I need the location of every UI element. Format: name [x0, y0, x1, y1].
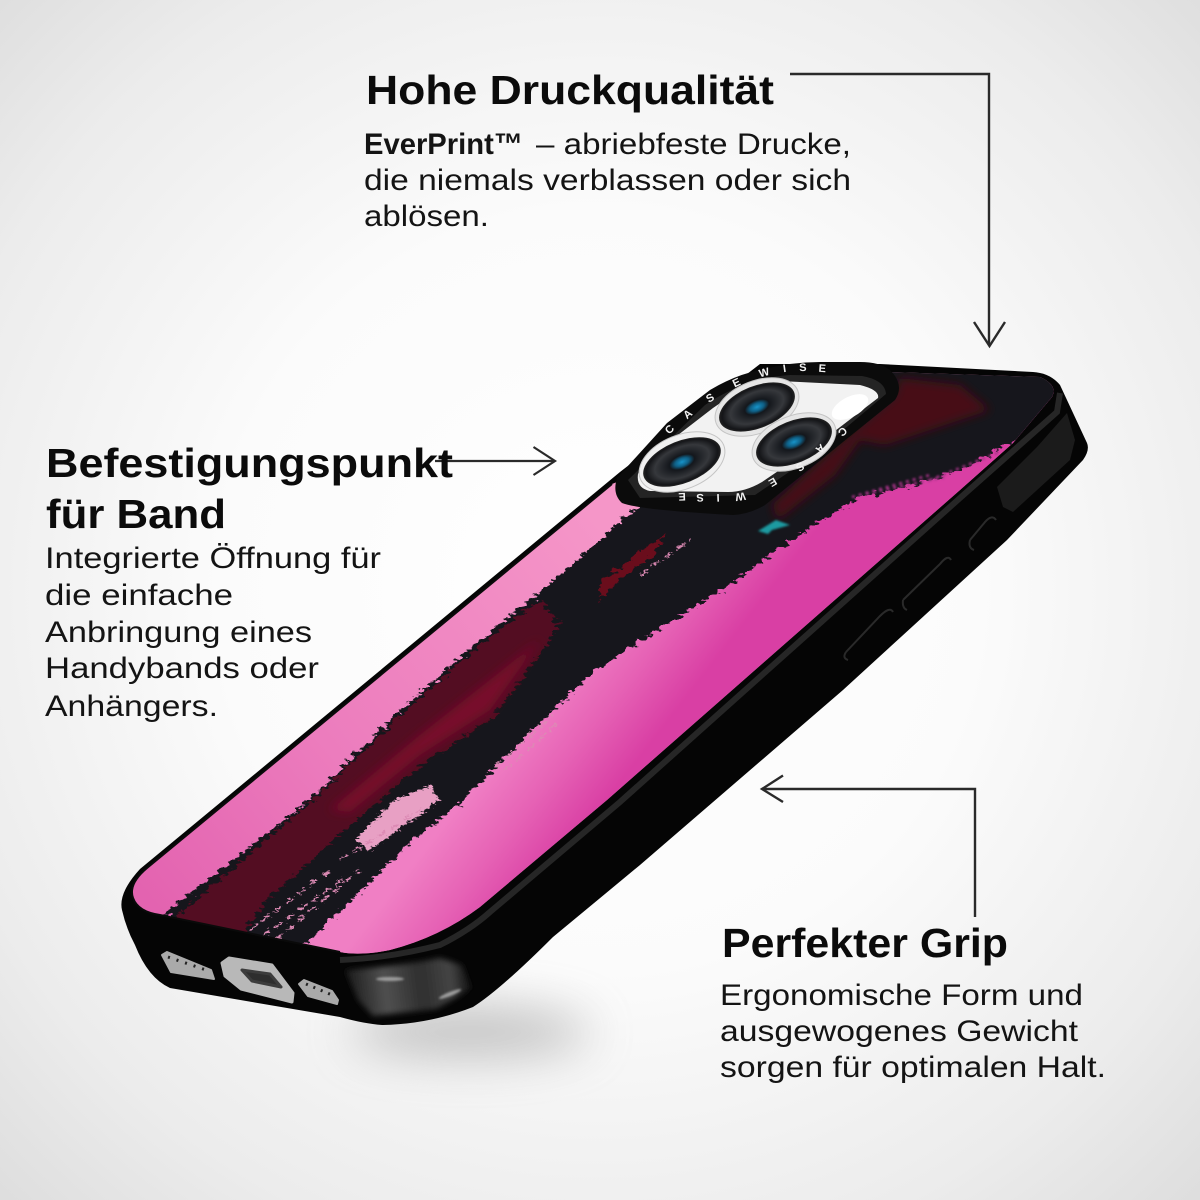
bump lettering: S	[793, 459, 806, 473]
speckled pink edge	[852, 452, 1000, 497]
heading: band attachment	[46, 440, 453, 537]
band attachment slot	[997, 413, 1075, 512]
side reflection near bottom corner	[345, 958, 472, 1016]
text block: print quality	[364, 67, 851, 233]
description: band attachment: Integrierte Öffnung für	[45, 542, 381, 575]
heading: band attachment: für Band	[46, 491, 226, 537]
description: grip: Ergonomische Form und	[720, 979, 1083, 1012]
bump lettering	[663, 362, 849, 503]
lens right	[743, 401, 845, 483]
camera bump	[615, 362, 899, 515]
phone shadow	[350, 1008, 590, 1056]
description: print quality	[364, 128, 851, 233]
heading: grip: Perfekter Grip	[722, 920, 1008, 966]
scratch marks lower band	[250, 540, 690, 940]
bump lettering: C	[663, 423, 677, 437]
right speaker grill	[299, 980, 338, 1004]
description: band attachment: die einfache	[45, 579, 233, 612]
bump lettering: S	[696, 491, 704, 503]
face rim line	[132, 484, 612, 952]
bump lettering: A	[681, 408, 695, 422]
pink left lane	[132, 372, 1054, 954]
arrow: print quality	[790, 74, 1005, 346]
bump frame	[615, 362, 899, 515]
bump lettering: A	[813, 441, 827, 455]
teal mark	[758, 520, 790, 534]
camera window	[638, 381, 878, 492]
description: band attachment: Anhängers.	[45, 690, 218, 723]
description: print quality: – abriebfeste Drucke,	[536, 128, 851, 161]
arrow: grip	[762, 776, 975, 917]
description: grip: ausgewogenes Gewicht	[720, 1015, 1079, 1048]
bump inner recess	[628, 375, 886, 498]
bump lettering: S	[799, 362, 807, 374]
description: grip	[720, 979, 1106, 1084]
description: print quality: ablösen.	[364, 200, 489, 233]
description: print quality: EverPrint™	[364, 128, 523, 161]
text block: grip	[720, 920, 1106, 1084]
lens left	[630, 420, 734, 504]
description: grip: sorgen für optimalen Halt.	[720, 1051, 1106, 1084]
bump lettering: C	[835, 424, 849, 438]
case body	[121, 364, 1088, 1025]
description: band attachment: Anbringung eines	[45, 616, 312, 649]
text block: band attachment	[45, 440, 453, 723]
side rim highlight	[340, 393, 1060, 960]
printed back face	[132, 372, 1054, 954]
charging port	[222, 958, 293, 1002]
maroon highlight	[330, 640, 540, 812]
pale scratched paint	[355, 785, 440, 850]
heading: band attachment: Befestigungspunkt	[46, 440, 453, 486]
bump lettering: E	[766, 475, 779, 489]
left speaker grill	[162, 952, 214, 979]
maroon paint lower	[175, 600, 560, 935]
heading: print quality: Hohe Druckqualität	[366, 67, 774, 113]
lens top	[706, 366, 808, 448]
red streak	[600, 532, 667, 600]
bump lettering: I	[782, 363, 787, 375]
bump lettering: W	[734, 489, 746, 503]
arrow: band attachment	[435, 447, 555, 475]
reflection glints	[376, 977, 462, 1000]
bump lettering: S	[704, 391, 717, 405]
description: print quality: die niemals verblassen oder sich	[364, 164, 851, 197]
pink right lane	[302, 383, 1054, 954]
flash	[828, 389, 872, 425]
bump lettering: E	[818, 363, 826, 375]
bump lettering: E	[731, 376, 743, 390]
description: band attachment: Handybands oder	[45, 652, 319, 685]
maroon paint upper	[772, 378, 990, 520]
bump lettering: E	[678, 490, 686, 502]
side buttons	[844, 517, 996, 660]
phone case	[100, 360, 1100, 1025]
bump lettering: W	[758, 366, 771, 380]
bump lettering: I	[716, 491, 720, 503]
dark brush band	[163, 360, 1100, 950]
description: band attachment	[45, 542, 381, 723]
